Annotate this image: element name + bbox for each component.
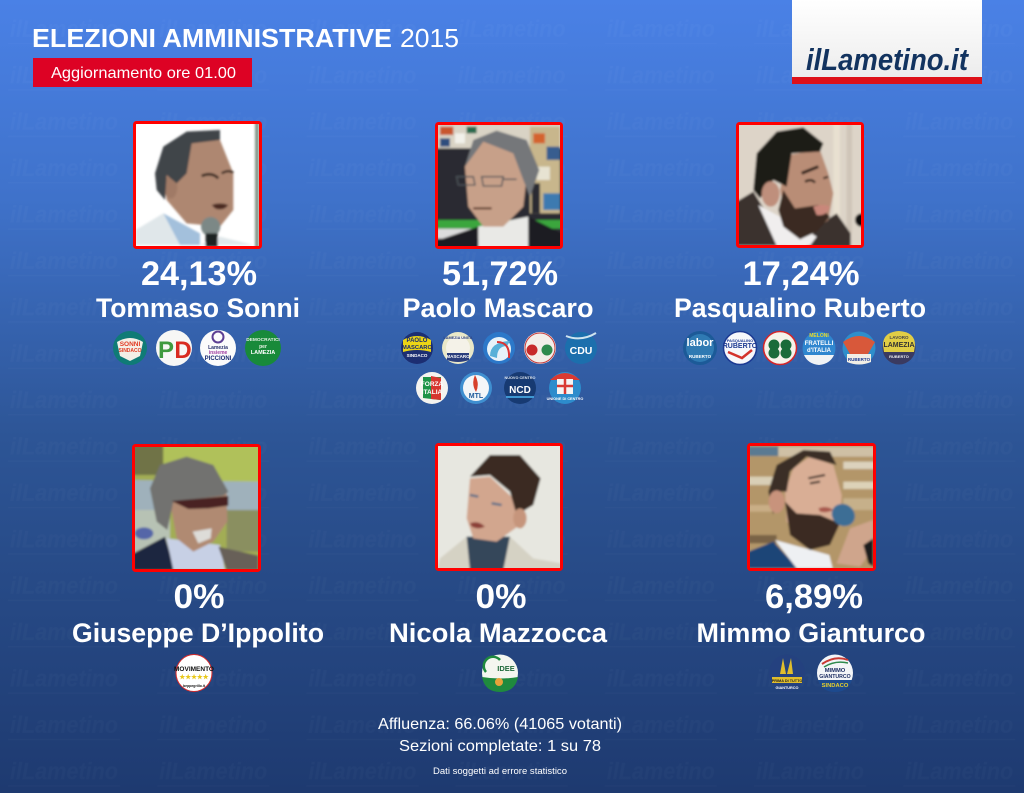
party logos: SINDACO	[118, 348, 142, 354]
party logos: NCD	[509, 385, 531, 396]
party logos: SINDACO	[822, 683, 849, 689]
footer statistics	[378, 716, 622, 777]
photo: Mimmo Gianturco	[748, 444, 875, 570]
party logos: PICCIONI	[205, 356, 232, 362]
party logos	[401, 332, 597, 404]
party logos: GIANTURCO	[776, 686, 799, 690]
party logos: NUOVO CENTRO	[504, 376, 536, 380]
party logos: FRATELLI	[805, 341, 834, 347]
percentage: 51,72%	[442, 255, 558, 293]
party logos: MIMMO	[825, 668, 846, 674]
party logos: DEMOCRATICI	[246, 337, 280, 343]
name: Paolo Mascaro	[402, 293, 594, 323]
candidate: Giuseppe D'Ippolito	[72, 445, 324, 692]
photo: Giuseppe D'Ippolito	[133, 445, 260, 570]
party logos	[113, 330, 281, 366]
party logos: PAOLO	[407, 338, 428, 344]
update badge	[33, 58, 252, 87]
party logo: MOVIMENTO	[174, 666, 214, 673]
title: 2015	[400, 25, 459, 53]
party logos	[769, 654, 853, 692]
photo: Paolo Mascaro	[436, 123, 563, 248]
party logos: FORZA	[421, 381, 443, 388]
candidate: Paolo Mascaro	[401, 123, 597, 404]
title: ELEZIONI AMMINISTRATIVE	[32, 23, 392, 53]
party logos: MASCARO	[446, 354, 470, 359]
party logos: SONNI	[120, 341, 140, 348]
party logos: MELONI	[809, 333, 829, 339]
party logos: D	[174, 337, 192, 364]
percentage: 0%	[476, 578, 526, 616]
percentage: 17,24%	[742, 255, 860, 293]
party logos: RUBERTO	[889, 354, 909, 359]
update badge: Aggiornamento ore 01.00	[51, 65, 236, 82]
party logos: RUBERTO	[723, 343, 758, 350]
party logos: per	[259, 344, 267, 350]
name: Giuseppe D’Ippolito	[72, 618, 324, 648]
party logos: RUBERTO	[689, 354, 712, 359]
party logos: Lamezia	[208, 345, 228, 351]
percentage: 24,13%	[141, 255, 257, 293]
party logos: MTL	[469, 393, 484, 400]
name: Tommaso Sonni	[96, 293, 300, 323]
party logos: CDU	[570, 345, 592, 357]
candidate: Mimmo Gianturco	[696, 444, 926, 692]
percentage: 0%	[174, 578, 224, 616]
party logos: LAVORO	[890, 335, 909, 340]
party logo	[174, 654, 214, 692]
name: Pasqualino Ruberto	[674, 293, 926, 323]
disclaimer: Dati soggetti ad errore statistico	[433, 766, 567, 777]
party logos: labor	[687, 337, 714, 349]
party logos: GIANTURCO	[819, 674, 851, 680]
logo: il Lametino: ilLametino.it	[806, 42, 969, 77]
candidate: Nicola Mazzocca	[389, 444, 607, 692]
party logo	[482, 654, 518, 692]
name: Mimmo Gianturco	[696, 618, 926, 648]
party logo: IDEE	[497, 664, 515, 673]
photo: Pasqualino Ruberto	[737, 122, 868, 247]
party logo: beppegrillo.it	[183, 684, 206, 688]
candidate: Tommaso Sonni	[96, 120, 300, 366]
party logos	[683, 331, 916, 365]
photo: Tommaso Sonni	[134, 120, 260, 248]
photo: Nicola Mazzocca	[436, 444, 563, 570]
turnout: Affluenza: 66.06% (41065 votanti)	[378, 716, 622, 733]
party logos: P	[158, 337, 174, 364]
party logos: PASQUALINO	[727, 338, 753, 343]
party logos: UNIONE DI CENTRO	[547, 397, 583, 401]
party logos: d'ITALIA	[807, 348, 832, 354]
party logos: SINDACO	[407, 353, 428, 358]
party logo: ★★★★★	[179, 673, 210, 681]
party logos: RUBERTO	[848, 357, 871, 362]
party logos: LAMEZIA	[251, 350, 275, 356]
name: Nicola Mazzocca	[389, 618, 607, 648]
percentage: 6,89%	[765, 578, 863, 616]
candidate: Pasqualino Ruberto	[674, 122, 926, 365]
party logos: insieme	[209, 350, 228, 356]
party logos: PRIMA DI TUTTO	[772, 679, 802, 683]
party logos: MASCARO	[402, 345, 432, 351]
logo: il Lametino	[792, 0, 982, 84]
party logos: LAMEZIA UNITA	[443, 336, 473, 340]
party logos: ITALIA	[422, 389, 443, 396]
sections completed: Sezioni completate: 1 su 78	[399, 738, 601, 755]
party logos: LAMEZIA	[883, 342, 915, 349]
